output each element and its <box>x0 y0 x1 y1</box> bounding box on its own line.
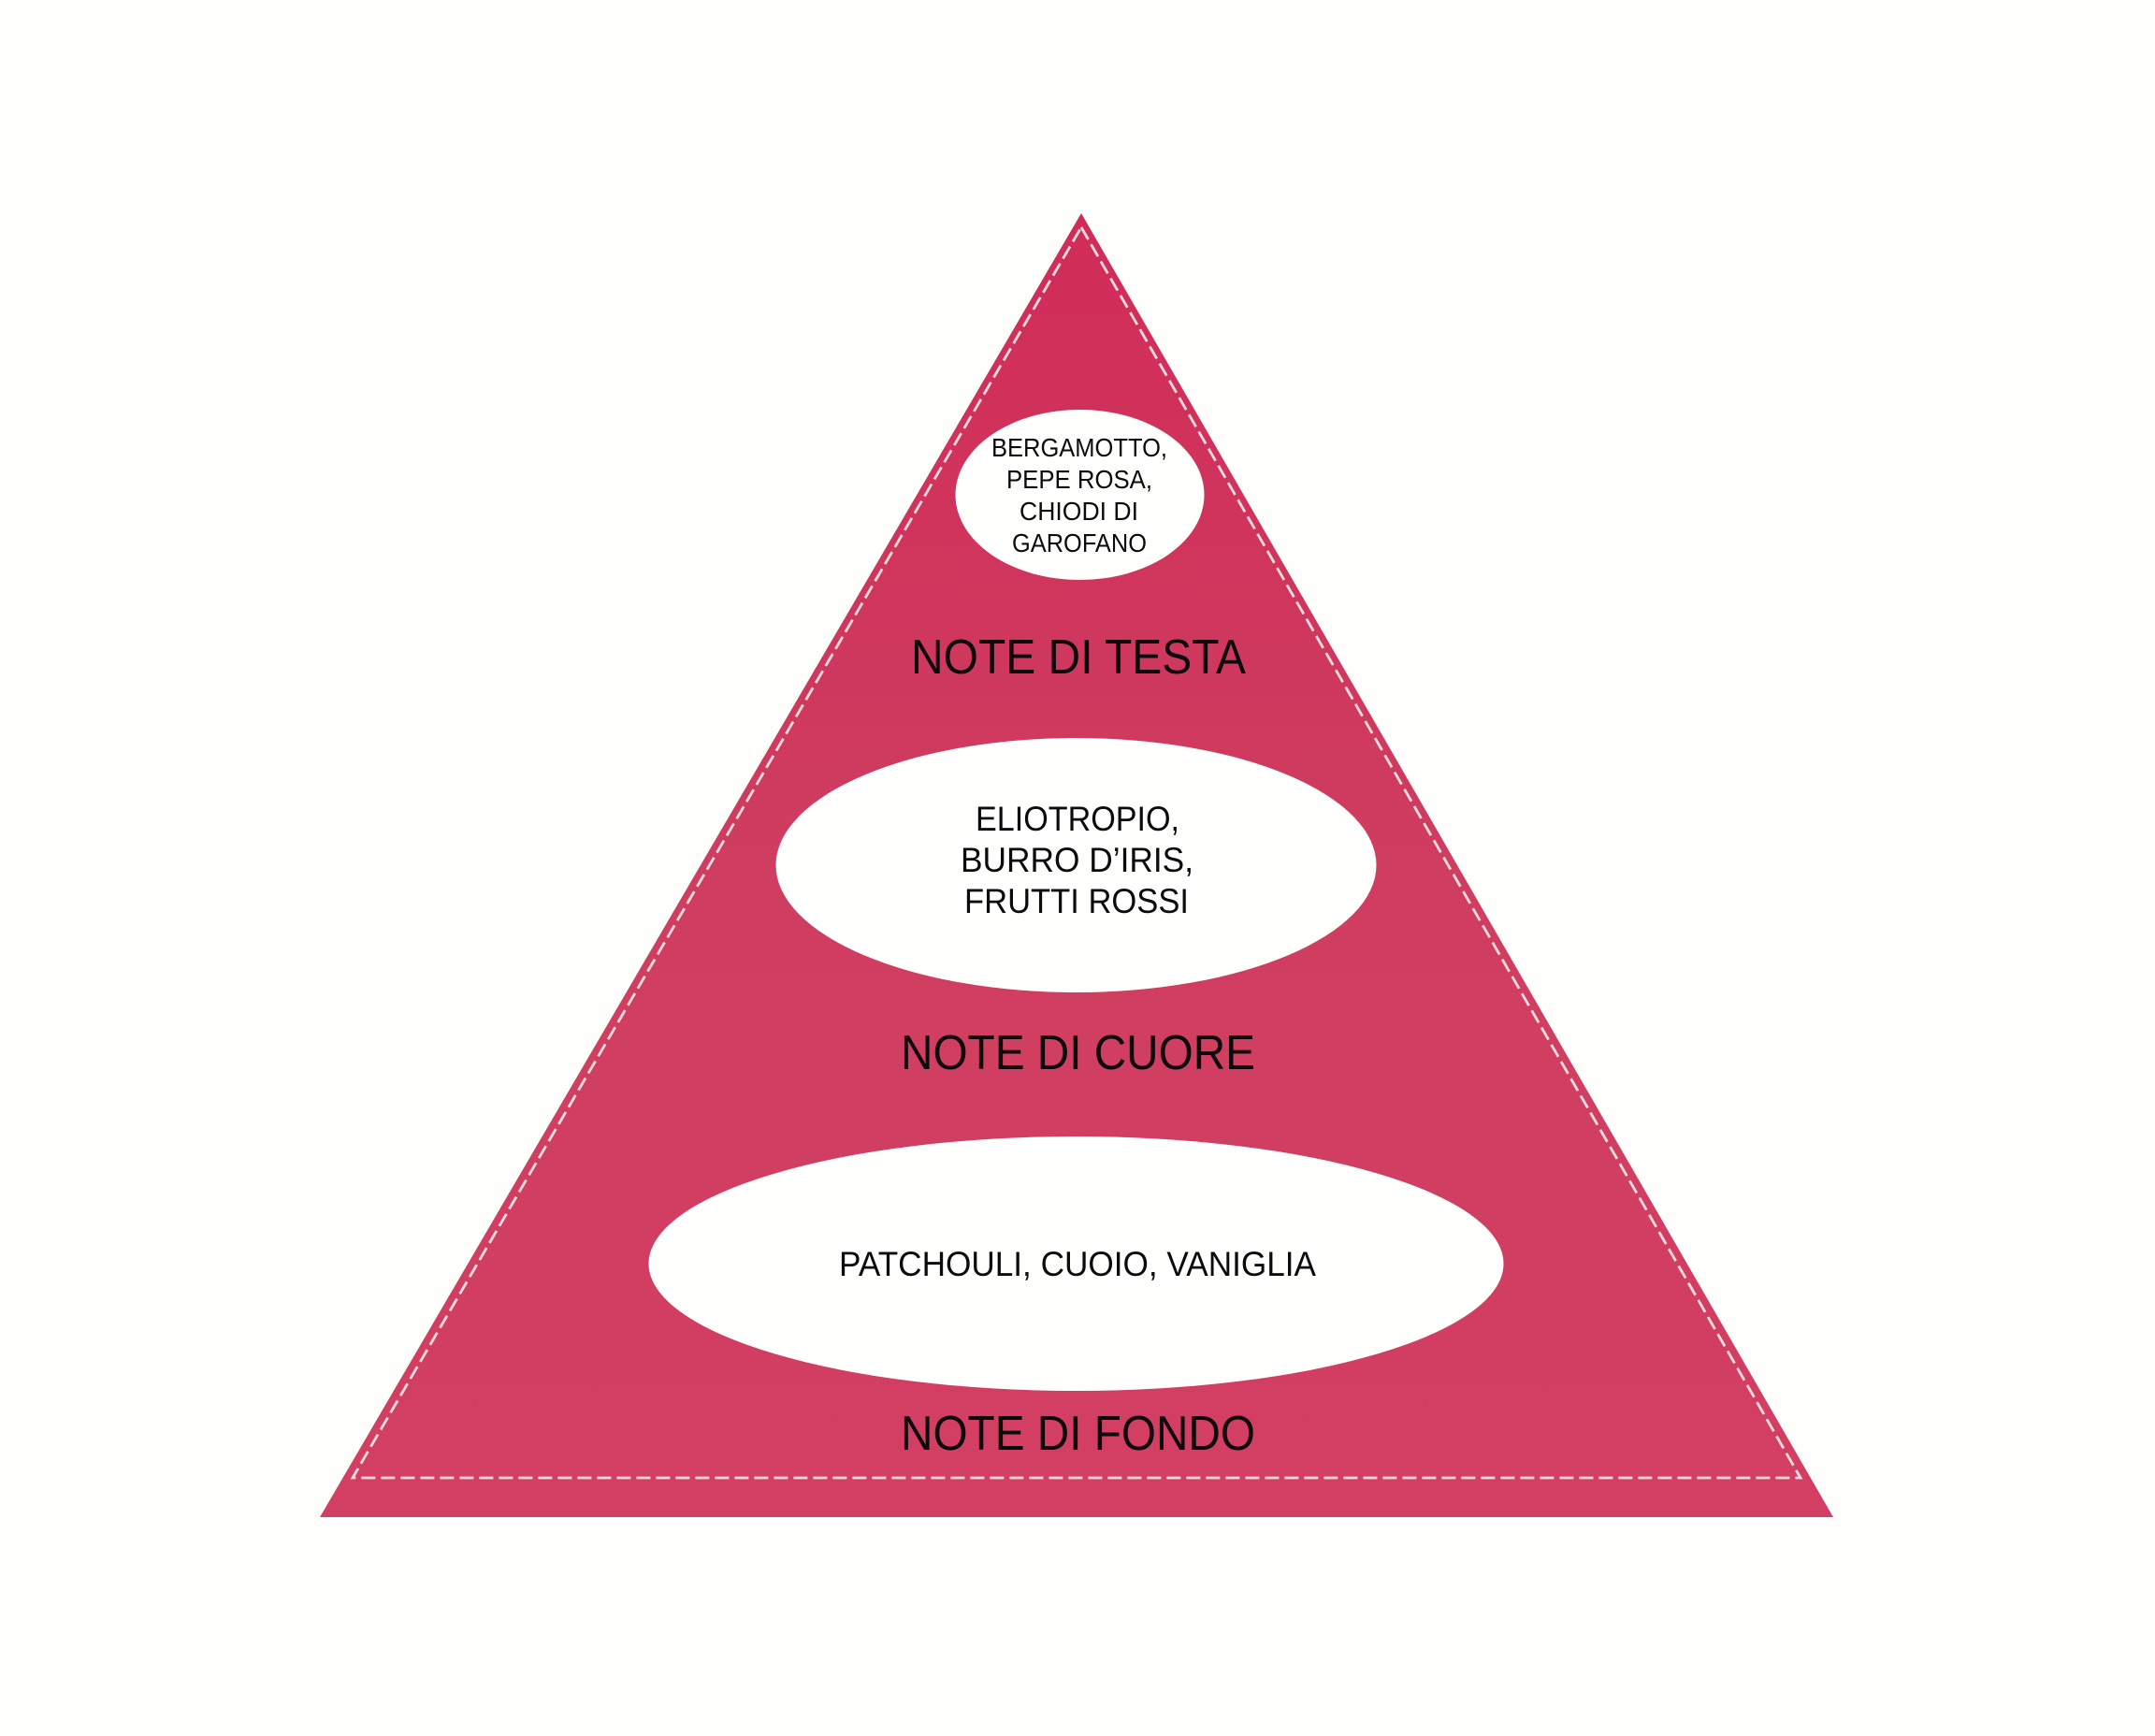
heart note ingredients: FRUTTI ROSSI <box>964 882 1189 920</box>
base note ellipse <box>649 1136 1504 1391</box>
dashed stitching <box>353 227 1801 1478</box>
top note ingredients: PEPE ROSA, <box>1006 465 1152 494</box>
heart note ellipse <box>776 738 1377 992</box>
heading: note di testa: NOTE DI TESTA <box>911 630 1246 685</box>
heading: note di fondo: NOTE DI FONDO <box>901 1407 1255 1461</box>
base note ingredients: PATCHOULI, CUOIO, VANIGLIA <box>839 1245 1316 1283</box>
heart note ingredients: BURRO D’IRIS, <box>961 841 1193 879</box>
top note ingredients: BERGAMOTTO, <box>991 433 1167 462</box>
heading: note di cuore: NOTE DI CUORE <box>901 1026 1255 1080</box>
pyramid triangle <box>320 213 1833 1517</box>
top note ingredients <box>991 433 1167 557</box>
top note ingredients: GAROFANO <box>1012 528 1147 557</box>
top note ingredients: CHIODI DI <box>1020 497 1138 526</box>
top note ellipse <box>956 410 1205 580</box>
heart note ingredients <box>961 800 1193 920</box>
heart note ingredients: ELIOTROPIO, <box>976 800 1179 838</box>
